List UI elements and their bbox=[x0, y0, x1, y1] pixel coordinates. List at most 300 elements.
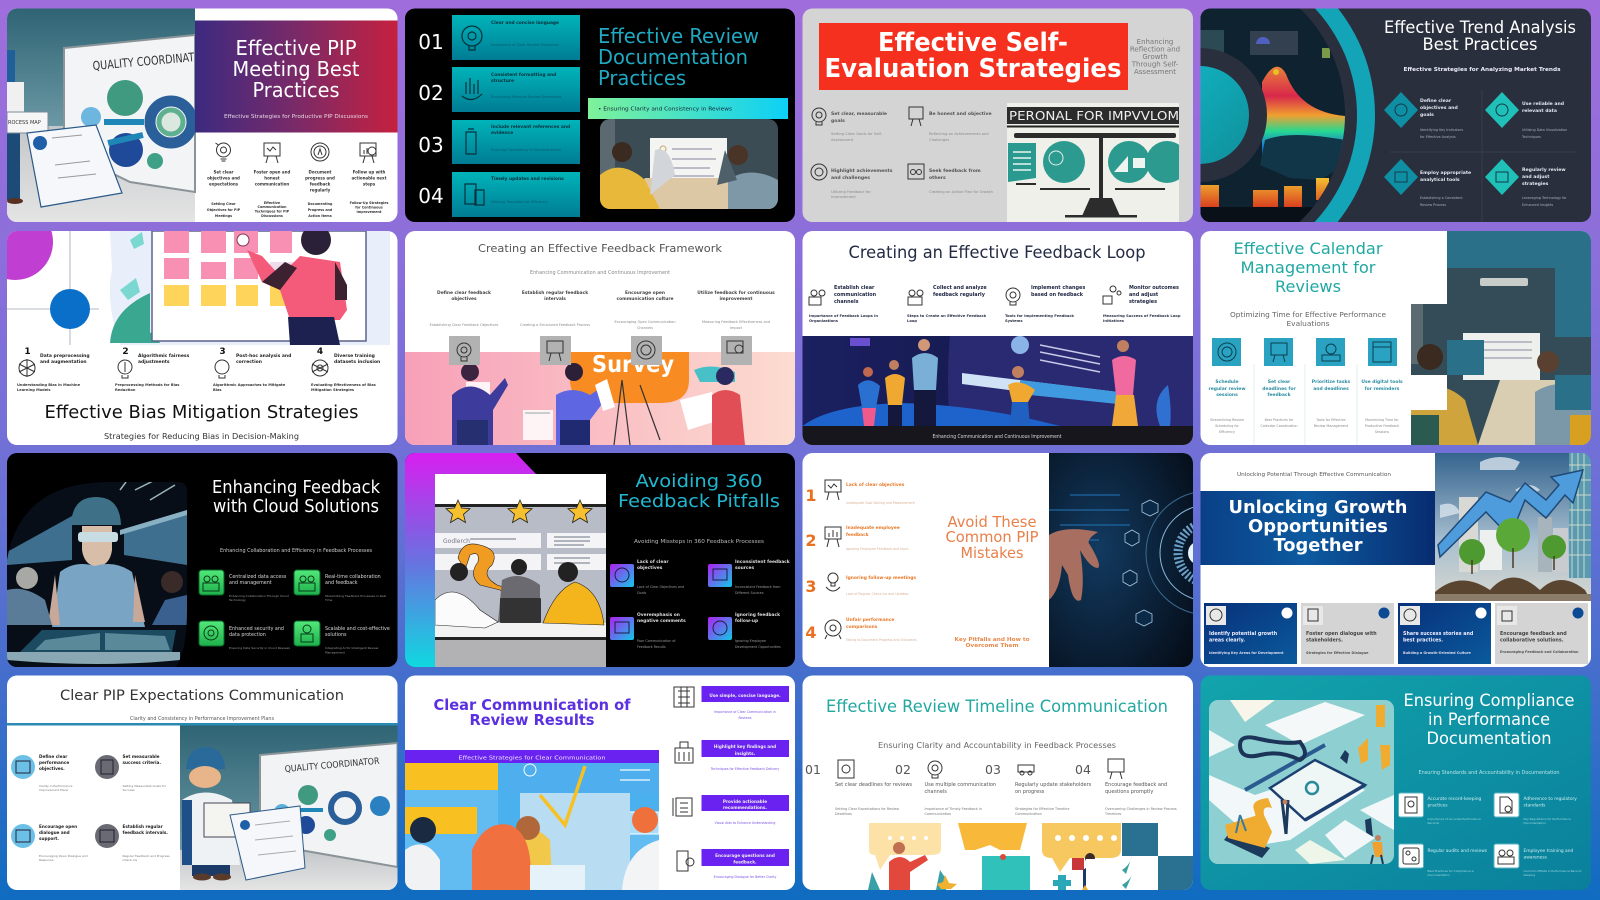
compliance items: awareness bbox=[1524, 854, 1548, 860]
benefit items: Ensuring Data Security in Cloud Reviews bbox=[229, 646, 290, 650]
strategy column: feedback. bbox=[733, 860, 757, 864]
calendar columns: Scheduling for bbox=[1215, 424, 1240, 428]
numbered list: Clear and concise language bbox=[491, 20, 559, 26]
expectation items: Improvement Plans bbox=[39, 788, 69, 792]
timeline steps: on progress bbox=[1015, 789, 1045, 795]
strategy items: Set clear, measurable bbox=[831, 111, 887, 117]
calendar columns: Streamlining Review bbox=[1210, 418, 1244, 422]
numbered list: 02 bbox=[418, 81, 444, 105]
feedback columns: Define clear feedback bbox=[437, 290, 491, 296]
timeline steps: questions promptly bbox=[1105, 789, 1153, 795]
title block bbox=[819, 23, 1128, 90]
icon row with labels: expectations bbox=[209, 182, 239, 186]
mistakes list: Failing to Document Progress and Outcomes bbox=[846, 638, 917, 642]
calendar columns: Tools for Effective bbox=[1315, 418, 1346, 422]
loop steps: Initiatives bbox=[1103, 319, 1125, 323]
image: isometric documents bbox=[1209, 700, 1394, 864]
strategy column: Encourage questions and bbox=[715, 853, 775, 858]
benefit items: data protection bbox=[229, 632, 266, 638]
action cards: Identify potential growth bbox=[1209, 631, 1278, 637]
title: Effective Review bbox=[598, 24, 759, 48]
action cards: Strategies for Effective Dialogue bbox=[1306, 651, 1369, 655]
timeline steps: Overcoming Challenges in Review Process bbox=[1105, 807, 1177, 811]
title: Effective Calendar bbox=[1234, 239, 1383, 258]
title bbox=[1386, 20, 1576, 50]
action cards bbox=[1204, 603, 1588, 664]
strategy items: Be honest and objective bbox=[929, 111, 992, 117]
mistakes list bbox=[805, 480, 917, 642]
pitfall items: follow-up bbox=[735, 618, 758, 624]
compliance items bbox=[1398, 793, 1582, 877]
strategy items: Highlight achievements bbox=[831, 168, 893, 174]
strategy items: Creating an Action Plan for Growth bbox=[929, 190, 994, 194]
mistakes list: Inadequate Goal Setting and Measurement bbox=[846, 501, 915, 505]
expectation items: performance bbox=[39, 760, 69, 765]
strategy grid: objectives and bbox=[1420, 105, 1458, 111]
strategy grid: and adjust bbox=[1522, 174, 1550, 180]
numbered list: Structuring Effective Review Summaries bbox=[491, 95, 562, 99]
title: Effective Bias Mitigation Strategies bbox=[44, 402, 358, 423]
icon row with labels: Effective bbox=[264, 201, 281, 205]
feedback columns: Utilize feedback for continuous bbox=[697, 290, 775, 296]
expectation items: Check-ins bbox=[122, 858, 138, 862]
feedback columns: Measuring Feedback Effectiveness and bbox=[702, 320, 770, 324]
title: Reviews bbox=[1275, 277, 1341, 296]
step items: Data preprocessing bbox=[40, 353, 90, 359]
strategy grid: for Effective Analysis bbox=[1420, 135, 1456, 139]
panel: Avoiding 360 Feedback Pitfalls bbox=[405, 453, 795, 667]
feedback columns: Encouraging Open Communication bbox=[614, 320, 676, 324]
title: Avoiding 360 bbox=[636, 471, 762, 492]
benefit items: and feedback bbox=[325, 580, 358, 586]
feedback columns: Creating a Structured Feedback Process bbox=[520, 323, 590, 327]
title: Clear Communication of bbox=[434, 696, 631, 714]
step items: datasets inclusion bbox=[334, 359, 380, 365]
side subtitle: Enhancing bbox=[1137, 38, 1173, 46]
feedback columns: intervals bbox=[544, 296, 566, 302]
strategy grid: Establishing a Consistent bbox=[1420, 196, 1463, 200]
step items: Algorithmic Approaches to Mitigate bbox=[213, 383, 286, 387]
title: Best Practices bbox=[1422, 35, 1538, 55]
compliance items: Common Pitfalls in Performance Record- bbox=[1524, 869, 1582, 873]
title band bbox=[1200, 491, 1435, 565]
strategy items: Challenges bbox=[929, 138, 949, 142]
strategy column: recommendations. bbox=[723, 805, 767, 810]
side subtitle: Reflection and bbox=[1130, 46, 1180, 54]
subtitle: Ensuring Standards and Accountability in Documentation bbox=[1418, 770, 1560, 776]
numbered list: evidence bbox=[491, 130, 513, 136]
calendar columns: regular review bbox=[1208, 386, 1246, 392]
icon row with labels: Setting Clear bbox=[211, 202, 236, 206]
numbered list: Ensuring Consistency in Documentation bbox=[491, 148, 561, 152]
compliance items: Documentation bbox=[1428, 873, 1450, 877]
title block: Evaluation Strategies bbox=[824, 54, 1122, 84]
timeline steps: 03 bbox=[985, 762, 1001, 777]
numbered list: Importance of Clear Review Objectives bbox=[491, 43, 559, 47]
calendar columns: and deadlines bbox=[1313, 386, 1349, 392]
feedback columns: improvement bbox=[719, 296, 753, 302]
loop steps: Systems bbox=[1005, 319, 1023, 323]
icon row with labels: objectives and bbox=[207, 176, 240, 180]
loop steps: strategies bbox=[1129, 299, 1157, 305]
timeline steps: channels bbox=[924, 789, 947, 795]
step items: and augmentation bbox=[40, 359, 87, 365]
icon row with labels: for Continuous bbox=[355, 206, 383, 210]
title: Documentation bbox=[1426, 729, 1552, 748]
timeline steps: 04 bbox=[1075, 762, 1091, 777]
loop steps: communication bbox=[834, 292, 877, 298]
panel: Avoid These Common PIP Mistakes bbox=[802, 453, 1270, 667]
expectation items: Clarity in Performance bbox=[39, 784, 73, 788]
calendar columns: Calendar Coordination bbox=[1261, 424, 1297, 428]
calendar columns: sessions bbox=[1216, 392, 1238, 398]
calendar columns: deadlines for bbox=[1262, 386, 1296, 392]
icon row with labels: Follow-Up Strategies bbox=[350, 201, 388, 205]
strategy grid bbox=[1384, 90, 1575, 222]
numbered list: Utilizing Templates for Efficiency bbox=[491, 200, 548, 204]
pitfall items: Goals bbox=[637, 591, 647, 595]
title: Management for bbox=[1240, 258, 1376, 277]
benefit items: Integrating AI for Intelligent Review bbox=[325, 646, 379, 650]
illustration: team at dashboard bbox=[802, 336, 1193, 431]
icon row with labels: Techniques for PIP bbox=[255, 210, 290, 214]
title band: Unlocking Growth bbox=[1228, 497, 1408, 518]
step items bbox=[17, 347, 380, 392]
title bbox=[618, 471, 780, 512]
calendar columns: feedback bbox=[1267, 392, 1292, 398]
expectation items bbox=[11, 754, 170, 862]
calendar columns: Review Management bbox=[1314, 424, 1349, 428]
icon row with labels: feedback bbox=[310, 182, 331, 186]
feedback columns: Encourage open bbox=[625, 290, 665, 296]
timeline steps: Communication bbox=[1015, 812, 1042, 816]
loop steps: channels bbox=[834, 299, 859, 305]
step items: 3 bbox=[219, 347, 226, 357]
mistakes list: comparisons bbox=[846, 624, 878, 630]
benefit items: Technology bbox=[228, 598, 246, 602]
subtitle band: Effective Strategies for Clear Communication bbox=[458, 756, 606, 762]
feedback columns: Establishing Clear Feedback Objectives bbox=[430, 323, 499, 327]
subtitle: Evaluations bbox=[1286, 320, 1330, 328]
image: personal improvement scale: PERONAL FOR IMPVVLOM bbox=[1009, 109, 1179, 123]
icon row with labels: Foster open and bbox=[254, 170, 290, 174]
pitfall items: Inconsistent Feedback from bbox=[735, 585, 781, 589]
feedback columns: Establish regular feedback bbox=[522, 290, 588, 296]
step items: 1 bbox=[24, 347, 31, 357]
title bbox=[946, 513, 1038, 562]
action cards: Share success stories and bbox=[1403, 631, 1474, 637]
mistakes list: feedback bbox=[846, 532, 869, 538]
subtitle: Enhancing Communication and Continuous Improvement bbox=[530, 270, 670, 276]
expectation items: feedback intervals. bbox=[122, 830, 168, 835]
title: Ensuring Compliance bbox=[1404, 691, 1574, 710]
numbered list: structure bbox=[491, 78, 514, 84]
compliance items: Regular audits and reviews bbox=[1428, 848, 1488, 854]
title: with Cloud Solutions bbox=[213, 496, 379, 517]
panel: Effective Bias Mitigation Strategies bbox=[7, 231, 398, 445]
timeline steps: Strategies for Effective Timeline bbox=[1015, 807, 1069, 811]
pitfall items: negative comments bbox=[637, 618, 686, 624]
mistakes list: 2 bbox=[805, 531, 817, 550]
subtitle: Overcome Them bbox=[966, 643, 1018, 649]
timeline steps: Use multiple communication bbox=[924, 782, 996, 788]
pitfall items: Development Opportunities bbox=[735, 645, 781, 649]
icon row with labels: Meetings bbox=[215, 214, 232, 218]
timeline steps bbox=[805, 759, 1177, 816]
title: Review Results bbox=[470, 711, 595, 729]
mistakes list: Ignoring Employee Feedback and Input bbox=[846, 547, 909, 551]
loop steps: Measuring Success of Feedback Loop bbox=[1103, 314, 1181, 318]
strategy grid: Regularly review bbox=[1522, 167, 1566, 173]
step items: Evaluating Effectiveness of Bias bbox=[311, 383, 376, 387]
strategy grid: Utilizing Data Visualization bbox=[1522, 128, 1567, 132]
loop steps: and adjust bbox=[1129, 292, 1159, 298]
title: Clear PIP Expectations Communication bbox=[60, 688, 344, 704]
panel: Unlocking Growth Opportunities Together bbox=[1200, 453, 1591, 667]
loop steps: Importance of Feedback Loops in bbox=[809, 314, 878, 318]
illustration: survey team: Survey bbox=[592, 352, 674, 378]
expectation items: Encourage open bbox=[39, 824, 77, 829]
title: Avoid These bbox=[948, 513, 1036, 531]
header band: Effective Strategies for Productive PIP Discussions bbox=[224, 114, 368, 120]
icon row with labels: Document bbox=[309, 170, 332, 174]
timeline steps: Encourage feedback and bbox=[1105, 782, 1167, 788]
expectation items: Define clear bbox=[39, 754, 68, 759]
calendar columns: Sessions bbox=[1375, 430, 1389, 434]
step items: Bias bbox=[213, 388, 222, 392]
icon row with labels: communication bbox=[255, 182, 289, 186]
gradient wedge bbox=[405, 453, 536, 667]
benefit items: Enhanced security and bbox=[229, 626, 284, 632]
compliance items: Importance of Accurate Performance bbox=[1428, 817, 1481, 821]
action cards: best practices. bbox=[1403, 638, 1443, 644]
icon row with labels: Progress and bbox=[308, 208, 333, 212]
subtitle: Clarity and Consistency in Performance Improvement Plans bbox=[130, 716, 274, 722]
image: quality coordinator character: QUALITY COORDINATOR bbox=[284, 757, 380, 775]
feedback columns: objectives bbox=[451, 296, 477, 302]
strategy grid: Employ appropriate bbox=[1420, 170, 1471, 176]
strategy items: Setting Clear Goals for Self- bbox=[831, 132, 883, 136]
expectation items: success criteria. bbox=[122, 760, 161, 765]
header band: Effective PIP bbox=[236, 36, 356, 60]
panel: Creating an Effective Feedback Loop bbox=[802, 231, 1193, 445]
step items: Preprocessing Methods for Bias bbox=[115, 383, 179, 387]
compliance items: Documentation bbox=[1524, 821, 1546, 825]
icon row with labels: Set clear bbox=[213, 170, 234, 174]
step items: 4 bbox=[317, 347, 323, 357]
title bbox=[434, 696, 631, 729]
footer strip bbox=[802, 426, 1193, 445]
numbered list: 01 bbox=[418, 30, 444, 54]
subtitle: Ensuring Clarity and Accountability in Feedback Processes bbox=[878, 741, 1116, 750]
compliance items: Accurate record-keeping bbox=[1428, 796, 1482, 802]
pitfall items: sources bbox=[735, 565, 755, 571]
pitfall items: Ignoring feedback bbox=[735, 612, 780, 618]
expectation items: Encouraging Open Dialogue and bbox=[39, 854, 88, 858]
title: Common PIP bbox=[946, 528, 1038, 546]
timeline steps: 02 bbox=[895, 762, 911, 777]
loop steps: Implement changes bbox=[1031, 285, 1085, 291]
strategy items: Seek feedback from bbox=[929, 168, 981, 174]
expectation items: Response bbox=[39, 858, 54, 862]
image: growth arrow and trees bbox=[1435, 453, 1591, 601]
subtitle band bbox=[405, 750, 659, 764]
mistakes list: 1 bbox=[805, 486, 817, 505]
strategy items: others bbox=[929, 175, 946, 181]
expectation items: dialogue and bbox=[39, 830, 70, 835]
image: sticky note board bbox=[7, 231, 390, 345]
strategy column: Reviews bbox=[738, 716, 752, 720]
expectation items: Set measurable bbox=[122, 754, 160, 759]
illustration: speech bubbles and team bbox=[868, 823, 1193, 890]
strategy items: Improvement bbox=[831, 195, 856, 199]
title: Creating an Effective Feedback Framework bbox=[478, 242, 723, 255]
pitfall items: Inconsistent feedback bbox=[735, 559, 790, 565]
image: team reviewing chart bbox=[405, 763, 659, 890]
compliance items: Best Practices for Compliance in bbox=[1428, 869, 1474, 873]
step items: Learning Models bbox=[17, 388, 51, 392]
subtitle: Effective Strategies for Analyzing Market Trends bbox=[1404, 67, 1561, 73]
strategy items bbox=[811, 107, 994, 199]
strategy items: goals bbox=[831, 118, 845, 124]
top text: Unlocking Potential Through Effective Communication bbox=[1237, 472, 1391, 478]
loop steps: feedback regularly bbox=[933, 292, 986, 298]
strategy grid: relevant data bbox=[1522, 108, 1557, 114]
benefit items: Scalable and cost-effective bbox=[325, 626, 390, 632]
subtitle strip bbox=[588, 98, 788, 119]
side subtitle: Growth bbox=[1142, 53, 1168, 61]
header band: Meeting Best bbox=[232, 57, 360, 81]
numbered list bbox=[418, 15, 580, 217]
title bbox=[212, 477, 381, 517]
strategy grid: Identifying Key Indicators bbox=[1420, 128, 1463, 132]
loop steps: Establish clear bbox=[834, 285, 875, 291]
action cards: collaborative solutions. bbox=[1500, 638, 1564, 644]
image: meeting at whiteboard bbox=[600, 119, 778, 209]
calendar columns: Efficiency bbox=[1219, 430, 1235, 434]
timeline steps: Regularly update stakeholders bbox=[1015, 782, 1092, 788]
panel: Ensuring Compliance in Performance Documentation bbox=[1200, 676, 1591, 890]
calendar columns: Schedule bbox=[1215, 379, 1239, 385]
step items: Understanding Bias in Machine bbox=[17, 383, 81, 387]
title: Mistakes bbox=[960, 544, 1024, 562]
action cards: Encourage feedback and bbox=[1500, 631, 1567, 637]
title bbox=[600, 28, 758, 86]
image: personal improvement scale bbox=[1007, 103, 1188, 222]
calendar columns: for reminders bbox=[1365, 386, 1400, 392]
strategy grid: Techniques bbox=[1521, 135, 1541, 139]
title bbox=[1404, 691, 1574, 748]
panel: Enhancing Feedback with Cloud Solutions bbox=[7, 453, 398, 667]
title band: Together bbox=[1274, 535, 1363, 556]
strategy column: Visual Aids to Enhance Understanding bbox=[715, 821, 775, 825]
title: Documentation bbox=[598, 45, 748, 69]
strategy items: and challenges bbox=[831, 175, 870, 181]
compliance items: practices bbox=[1428, 802, 1448, 808]
icon row with labels: honest bbox=[264, 176, 280, 180]
image: quality coordinator board bbox=[7, 8, 195, 222]
pitfall items: Lack of Clear Objectives and bbox=[637, 585, 684, 589]
action cards: areas clearly. bbox=[1209, 638, 1245, 644]
pitfall items: objectives bbox=[637, 565, 663, 571]
title: Feedback Pitfalls bbox=[618, 491, 780, 512]
benefit items: and management bbox=[229, 580, 272, 586]
numbered list: Include relevant references and bbox=[491, 124, 570, 130]
pitfall items: Ignoring Employee bbox=[735, 639, 766, 643]
pitfall items: Overemphasis on bbox=[637, 612, 680, 618]
image: quality coordinator board: QUALITY COORDINAT bbox=[92, 50, 195, 73]
expectation items: Regular Feedback and Progress bbox=[122, 854, 170, 858]
image: review meeting: Godlerch bbox=[443, 538, 470, 545]
mistakes list: Unfair performance bbox=[846, 617, 894, 623]
feedback columns: Impact bbox=[730, 326, 743, 330]
compliance items: Records bbox=[1428, 821, 1439, 825]
benefit items: Centralized data access bbox=[229, 574, 287, 580]
subtitle bbox=[954, 637, 1030, 649]
calendar columns bbox=[1208, 338, 1403, 445]
strategy column: Importance of Clear Communication in bbox=[714, 710, 776, 714]
mistakes list: Ignoring follow-up meetings bbox=[846, 575, 916, 581]
timeline steps: 01 bbox=[805, 762, 821, 777]
step items: correction bbox=[236, 359, 262, 365]
panel: Clear PIP Expectations Communication bbox=[7, 676, 398, 890]
panel: Effective Self-Evaluation Strategies bbox=[802, 8, 1193, 222]
expectation items: support. bbox=[39, 836, 59, 841]
panel: Effective Review Timeline Communication bbox=[802, 676, 1193, 890]
benefit items: Streamlining Feedback Processes in Real bbox=[325, 594, 386, 598]
panel: Effective Calendar Management for Reviews bbox=[1200, 231, 1591, 445]
step items: adjustments bbox=[138, 359, 170, 365]
strategy grid: Review Process bbox=[1420, 203, 1446, 207]
header band bbox=[195, 20, 398, 132]
image: quality coordinator character bbox=[180, 726, 398, 890]
header band: Practices bbox=[252, 78, 340, 102]
image: heat map with arcs bbox=[1200, 8, 1375, 222]
icon row with labels: regularly bbox=[310, 188, 331, 192]
action cards: Identifying Key Areas for Development bbox=[1209, 651, 1284, 655]
calendar columns: Prioritize tasks bbox=[1312, 379, 1351, 385]
mistakes list: Inadequate employee bbox=[846, 525, 900, 531]
title bbox=[1235, 242, 1383, 292]
loop steps: Tools for Implementing Feedback bbox=[1005, 314, 1075, 318]
subtitle: Enhancing Collaboration and Efficiency in Feedback Processes bbox=[220, 548, 372, 554]
benefit items: Enhancing Collaboration Through Cloud bbox=[229, 594, 289, 598]
footer strip: Enhancing Communication and Continuous Improvement bbox=[932, 434, 1062, 440]
calendar columns: Set clear bbox=[1268, 379, 1291, 385]
strategy grid: goals bbox=[1420, 112, 1434, 118]
subtitle: Optimizing Time for Effective Performance bbox=[1230, 311, 1386, 319]
strategy column: Highlight key findings and bbox=[714, 744, 776, 749]
numbered list: 03 bbox=[418, 133, 444, 157]
expectation items: Setting Measurable Goals for bbox=[122, 784, 167, 788]
title band: Opportunities bbox=[1248, 516, 1388, 537]
icon row with labels: Action Items bbox=[308, 214, 332, 218]
icon row with labels: actionable next bbox=[351, 176, 387, 180]
numbered list: Consistent formatting and bbox=[491, 72, 556, 78]
icon row with labels: Documenting bbox=[308, 202, 333, 206]
side subtitle: Assessment bbox=[1134, 68, 1176, 76]
benefit items: Real-time collaboration bbox=[325, 574, 381, 580]
expectation items: Establish regular bbox=[122, 824, 164, 829]
compliance items: Key Regulations for Performance bbox=[1524, 817, 1571, 821]
loop steps: Loop bbox=[907, 319, 917, 323]
timeline steps: Deadlines bbox=[835, 812, 852, 816]
icon row with labels bbox=[207, 143, 388, 218]
pitfall items: Different Sources bbox=[735, 591, 764, 595]
expectation items: objectives. bbox=[39, 766, 65, 771]
loop steps: Organizations bbox=[809, 319, 839, 323]
feedback columns: Channels bbox=[637, 326, 653, 330]
